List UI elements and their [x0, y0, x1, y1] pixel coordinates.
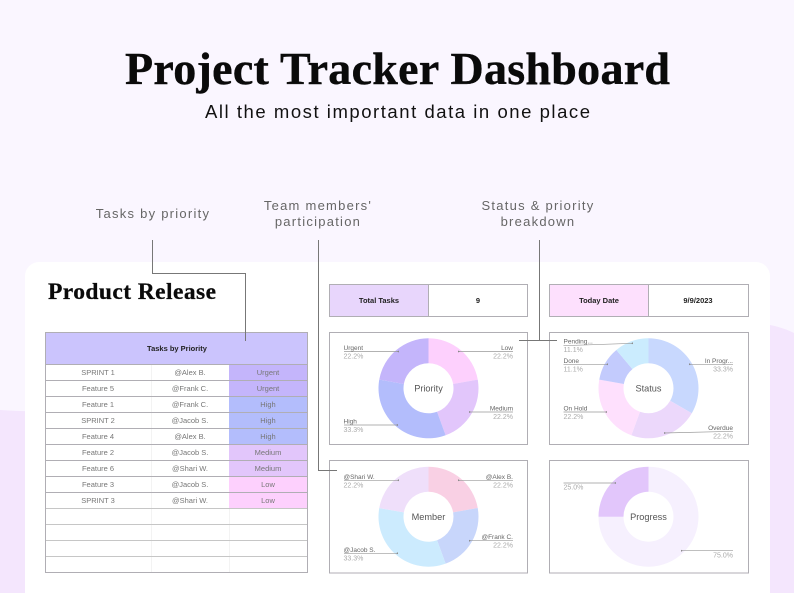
panel: status donut chart: 22.2%	[564, 414, 583, 421]
panel: status donut chart: In Progr...	[705, 358, 733, 365]
panel: tasks by priority table: SPRINT 3	[81, 496, 115, 505]
panel: tasks by priority table: @Shari W.	[172, 464, 208, 473]
panel: member donut chart: Member	[412, 512, 445, 522]
panel: tasks by priority table: Medium	[255, 448, 281, 457]
panel: tasks by priority table: Feature 4	[82, 432, 114, 441]
panel: status donut chart: 22.2%	[713, 434, 733, 440]
panel: tasks by priority table: Urgent	[257, 368, 280, 377]
panel: tasks by priority table: Feature 2	[82, 448, 114, 457]
panel: member donut chart: @Frank C.	[481, 534, 513, 541]
panel: member donut chart: 33.3%	[344, 555, 363, 562]
panel: status donut chart: Pending...	[564, 338, 593, 346]
panel: priority donut chart: High	[344, 418, 357, 426]
callout: tasks by priority: Tasks by priority	[96, 206, 210, 221]
panel: tasks by priority table: Feature 1	[82, 400, 114, 409]
panel: tasks by priority table: Medium	[255, 464, 281, 473]
callout: status and priority breakdown: breakdown	[501, 214, 575, 229]
panel: status donut chart: Done	[564, 358, 579, 365]
panel: total tasks: 9	[476, 296, 480, 305]
panel: tasks by priority table	[46, 332, 308, 572]
panel: tasks by priority table: High	[260, 400, 276, 409]
callout: team members' participation: Team members'	[264, 198, 372, 213]
panel: status donut chart: 11.1%	[564, 347, 583, 354]
panel: priority donut chart: 22.2%	[344, 354, 363, 360]
panel: tasks by priority table: @Alex B.	[174, 432, 206, 441]
panel: tasks by priority table: Low	[261, 480, 275, 489]
panel: tasks by priority table: @Shari W.	[172, 496, 208, 505]
panel: tasks by priority table: Low	[261, 496, 275, 505]
panel: member donut chart	[330, 460, 528, 573]
panel: today date: Today Date	[579, 296, 619, 305]
panel: tasks by priority table: SPRINT 1	[81, 368, 115, 377]
panel: progress donut chart: 75.0%	[713, 552, 733, 560]
panel: tasks by priority table: @Frank C.	[172, 400, 208, 409]
panel: tasks by priority table: @Alex B.	[174, 368, 206, 377]
panel: status donut chart	[550, 332, 748, 444]
panel: member donut chart: 22.2%	[344, 482, 363, 489]
panel: member donut chart: @Shari W.	[344, 474, 375, 481]
panel: total tasks	[330, 284, 528, 316]
subtitle: All the most important data in one place	[205, 101, 590, 122]
panel: tasks by priority table: @Jacob S.	[172, 416, 208, 425]
panel: today date	[550, 284, 748, 316]
panel: progress donut chart	[550, 460, 748, 573]
panel: tasks by priority table: High	[260, 432, 276, 441]
panel: tasks by priority table: @Jacob S.	[172, 448, 208, 457]
title: Project Tracker Dashboard	[125, 43, 670, 94]
panel: tasks by priority table: Feature 5	[82, 384, 114, 393]
panel: tasks by priority table: High	[260, 416, 276, 425]
panel: status donut chart: Status	[635, 384, 662, 394]
panel: member donut chart: 22.2%	[493, 482, 513, 489]
background wave	[0, 319, 794, 593]
panel: tasks by priority table: Tasks by Priority	[147, 344, 208, 353]
panel: member donut chart: @Jacob S.	[344, 547, 376, 554]
panel: progress donut chart: Progress	[630, 512, 667, 522]
panel: priority donut chart: Medium	[490, 406, 513, 412]
connector: tasks by priority	[152, 240, 246, 341]
panel: total tasks: Total Tasks	[359, 296, 399, 305]
panel: priority donut chart: Priority	[414, 384, 443, 394]
panel: tasks by priority table: Urgent	[257, 384, 280, 393]
panel heading: Product Release: Product Release	[48, 279, 216, 305]
panel: priority donut chart: Low	[501, 345, 513, 352]
panel: status donut chart: On Hold	[564, 406, 588, 412]
panel: tasks by priority table: @Jacob S.	[172, 480, 208, 489]
panel: today date: 9/9/2023	[683, 296, 713, 305]
panel: priority donut chart: 22.2%	[493, 414, 513, 421]
panel: priority donut chart	[330, 332, 528, 444]
panel: tasks by priority table: SPRINT 2	[81, 416, 115, 425]
panel: tasks by priority table: Feature 3	[82, 480, 114, 489]
panel: status donut chart: 33.3%	[713, 366, 733, 374]
panel: status donut chart: 11.1%	[564, 366, 583, 374]
panel: status donut chart: Overdue	[708, 425, 733, 432]
panel: priority donut chart: 33.3%	[344, 427, 363, 434]
connector: team members	[318, 240, 337, 470]
panel: priority donut chart: 22.2%	[493, 354, 513, 360]
panel: priority donut chart: Urgent	[344, 345, 363, 352]
panel: tasks by priority table: Feature 6	[82, 464, 114, 473]
panel: progress donut chart: 25.0%	[564, 484, 583, 492]
panel: member donut chart: @Alex B.	[486, 474, 513, 481]
callout: status and priority breakdown: Status & priority	[481, 198, 595, 213]
panel: tasks by priority table: @Frank C.	[172, 384, 208, 393]
panel: member donut chart: 22.2%	[493, 543, 513, 550]
dashboard card	[25, 262, 770, 593]
callout: team members' participation: participation	[275, 214, 361, 229]
connector: status and priority	[519, 240, 557, 340]
